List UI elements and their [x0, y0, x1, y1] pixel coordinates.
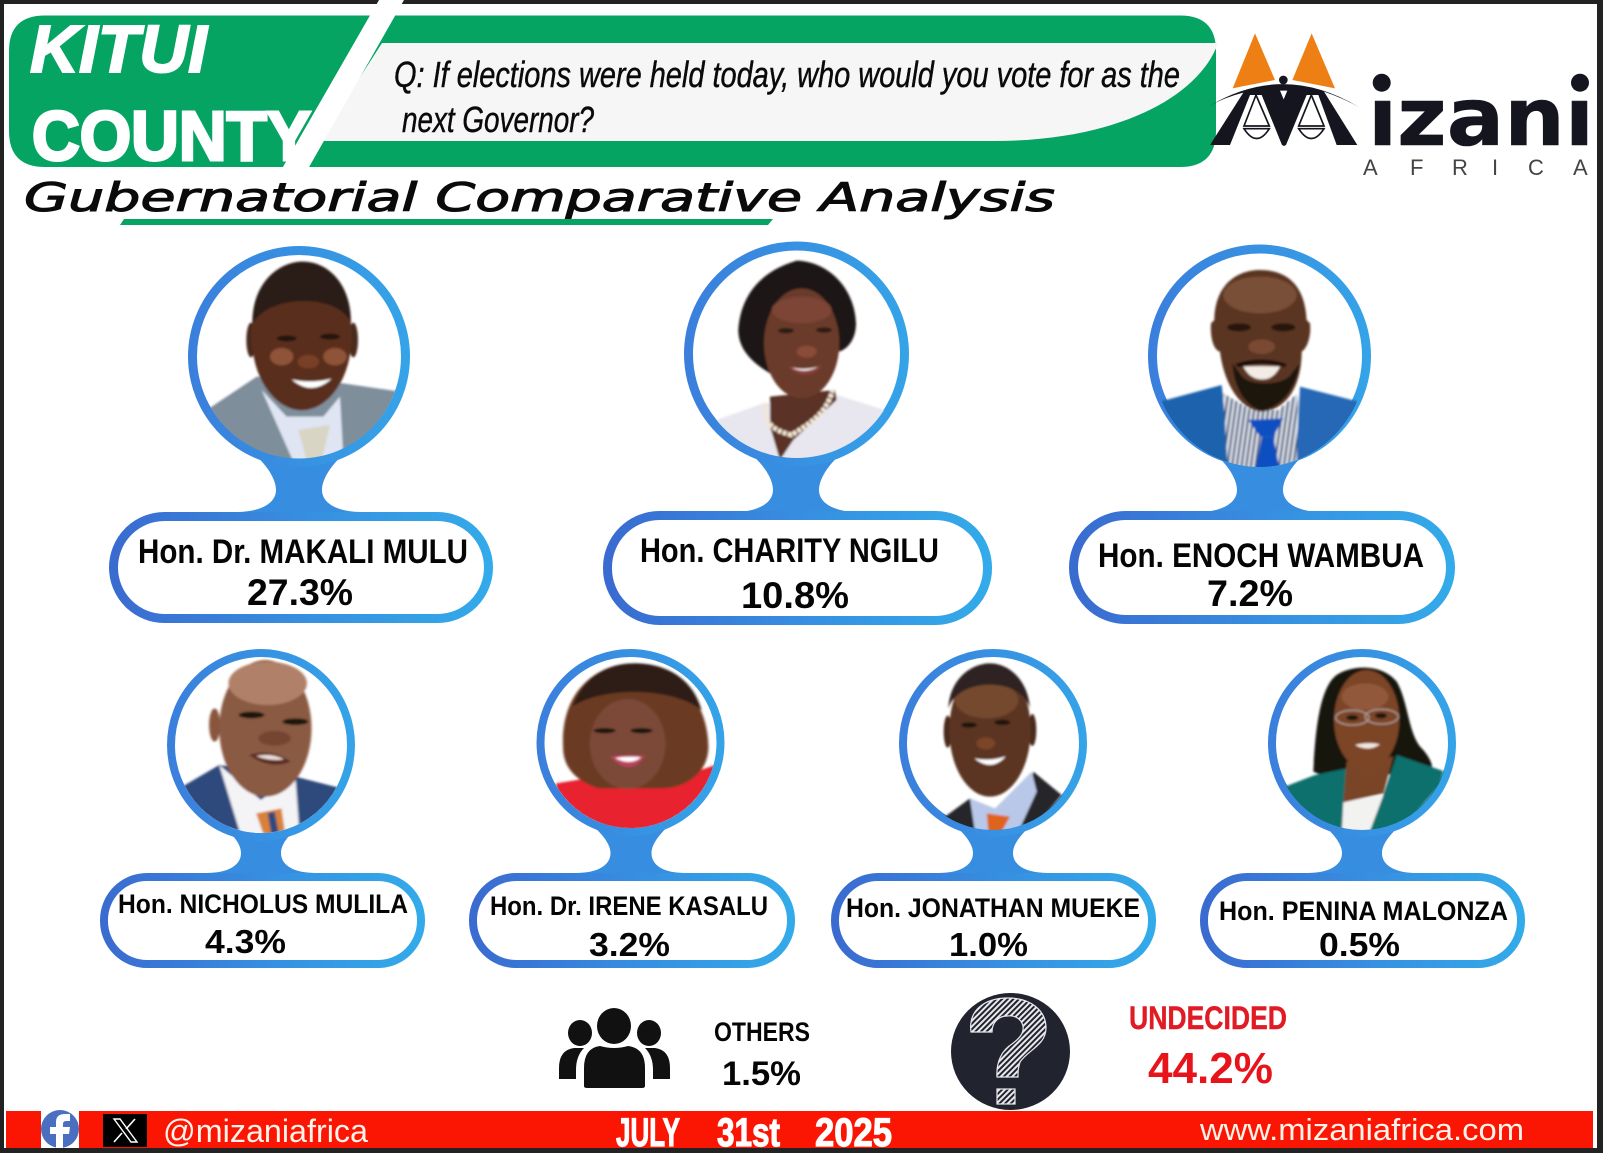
undecided value: 44.2%: [1148, 1044, 1273, 1093]
candidate card: Makali Mulu: [114, 250, 488, 618]
banner: county panel: [9, 16, 370, 167]
name pill: [114, 516, 488, 618]
county title: COUNTY: [32, 97, 311, 175]
name: Hon. Dr. IRENE KASALU: [490, 891, 768, 921]
others label: OTHERS: [714, 1017, 810, 1047]
name: Hon. CHARITY NGILU: [640, 532, 939, 570]
banner: question panel: [309, 16, 1216, 167]
social handle: @mizaniafrica: [163, 1113, 368, 1149]
icon: X: [103, 1114, 147, 1147]
name pill: [608, 516, 988, 620]
undecided label: UNDECIDED: [1129, 1000, 1287, 1036]
name pill: [835, 877, 1152, 964]
county title: KITUI: [30, 12, 208, 87]
subtitle: Gubernatorial Comparative Analysis: [24, 176, 1055, 221]
name pill: [104, 877, 421, 964]
name pill: [473, 877, 791, 964]
header banner: [9, 0, 1218, 175]
name: Hon. PENINA MALONZA: [1219, 896, 1508, 926]
name: Hon. NICHOLUS MULILA: [118, 889, 408, 919]
candidate card: Nicholus Mulila: [104, 653, 421, 964]
logo M mark with peaks and scales: [1209, 33, 1359, 146]
percentage: 1.0%: [949, 926, 1028, 963]
logo: Mizani Africa: [1209, 33, 1594, 180]
name: Hon. JONATHAN MUEKE: [846, 893, 1140, 923]
name: Hon. ENOCH WAMBUA: [1098, 537, 1424, 575]
date: [616, 1111, 892, 1153]
logo tagline: AFRICA: [1363, 155, 1588, 180]
portrait: Jonathan Mueke: [944, 663, 1062, 835]
icon: question mark badge: [951, 993, 1070, 1110]
others value: 1.5%: [722, 1055, 801, 1093]
question text: next Governor?: [402, 99, 594, 140]
candidate card: Enoch Wambua: [1074, 249, 1450, 620]
logo round dots: [1368, 66, 1594, 99]
subtitle underline: [120, 219, 773, 225]
portrait: Nicholus Mulila: [182, 660, 342, 840]
portrait: Penina Malonza: [1285, 668, 1443, 835]
candidate card: Charity Ngilu: [608, 246, 988, 620]
candidate card: Jonathan Mueke: [835, 653, 1152, 964]
candidate card: Penina Malonza: [1204, 653, 1521, 964]
portrait: Enoch Wambua: [1160, 270, 1358, 480]
question text: [394, 54, 1180, 140]
question band: [319, 43, 1218, 141]
name pill: [1074, 516, 1450, 620]
name pill: [1204, 877, 1521, 964]
percentage: 4.3%: [205, 923, 286, 960]
portrait: Charity Ngilu: [717, 261, 885, 463]
website: www.mizaniafrica.com: [1199, 1112, 1524, 1147]
footer bar: [6, 1105, 1593, 1153]
question text: Q: If elections were held today, who would you vote for as the: [394, 54, 1180, 95]
logo wordmark: izani: [1368, 71, 1594, 164]
icon: group of people: [559, 1008, 670, 1088]
candidate card: Irene Kasalu: [473, 653, 791, 964]
county title: [30, 12, 311, 175]
white diagonal stripe: [283, 0, 404, 167]
name: Hon. Dr. MAKALI MULU: [138, 533, 468, 571]
percentage: 27.3%: [247, 572, 353, 613]
portrait: Makali Mulu: [207, 262, 400, 467]
icon: facebook: [41, 1105, 79, 1148]
percentage: 10.8%: [741, 575, 849, 616]
portrait: Irene Kasalu: [556, 663, 720, 840]
percentage: 7.2%: [1207, 573, 1293, 614]
percentage: 3.2%: [589, 926, 670, 963]
percentage: 0.5%: [1319, 926, 1400, 963]
